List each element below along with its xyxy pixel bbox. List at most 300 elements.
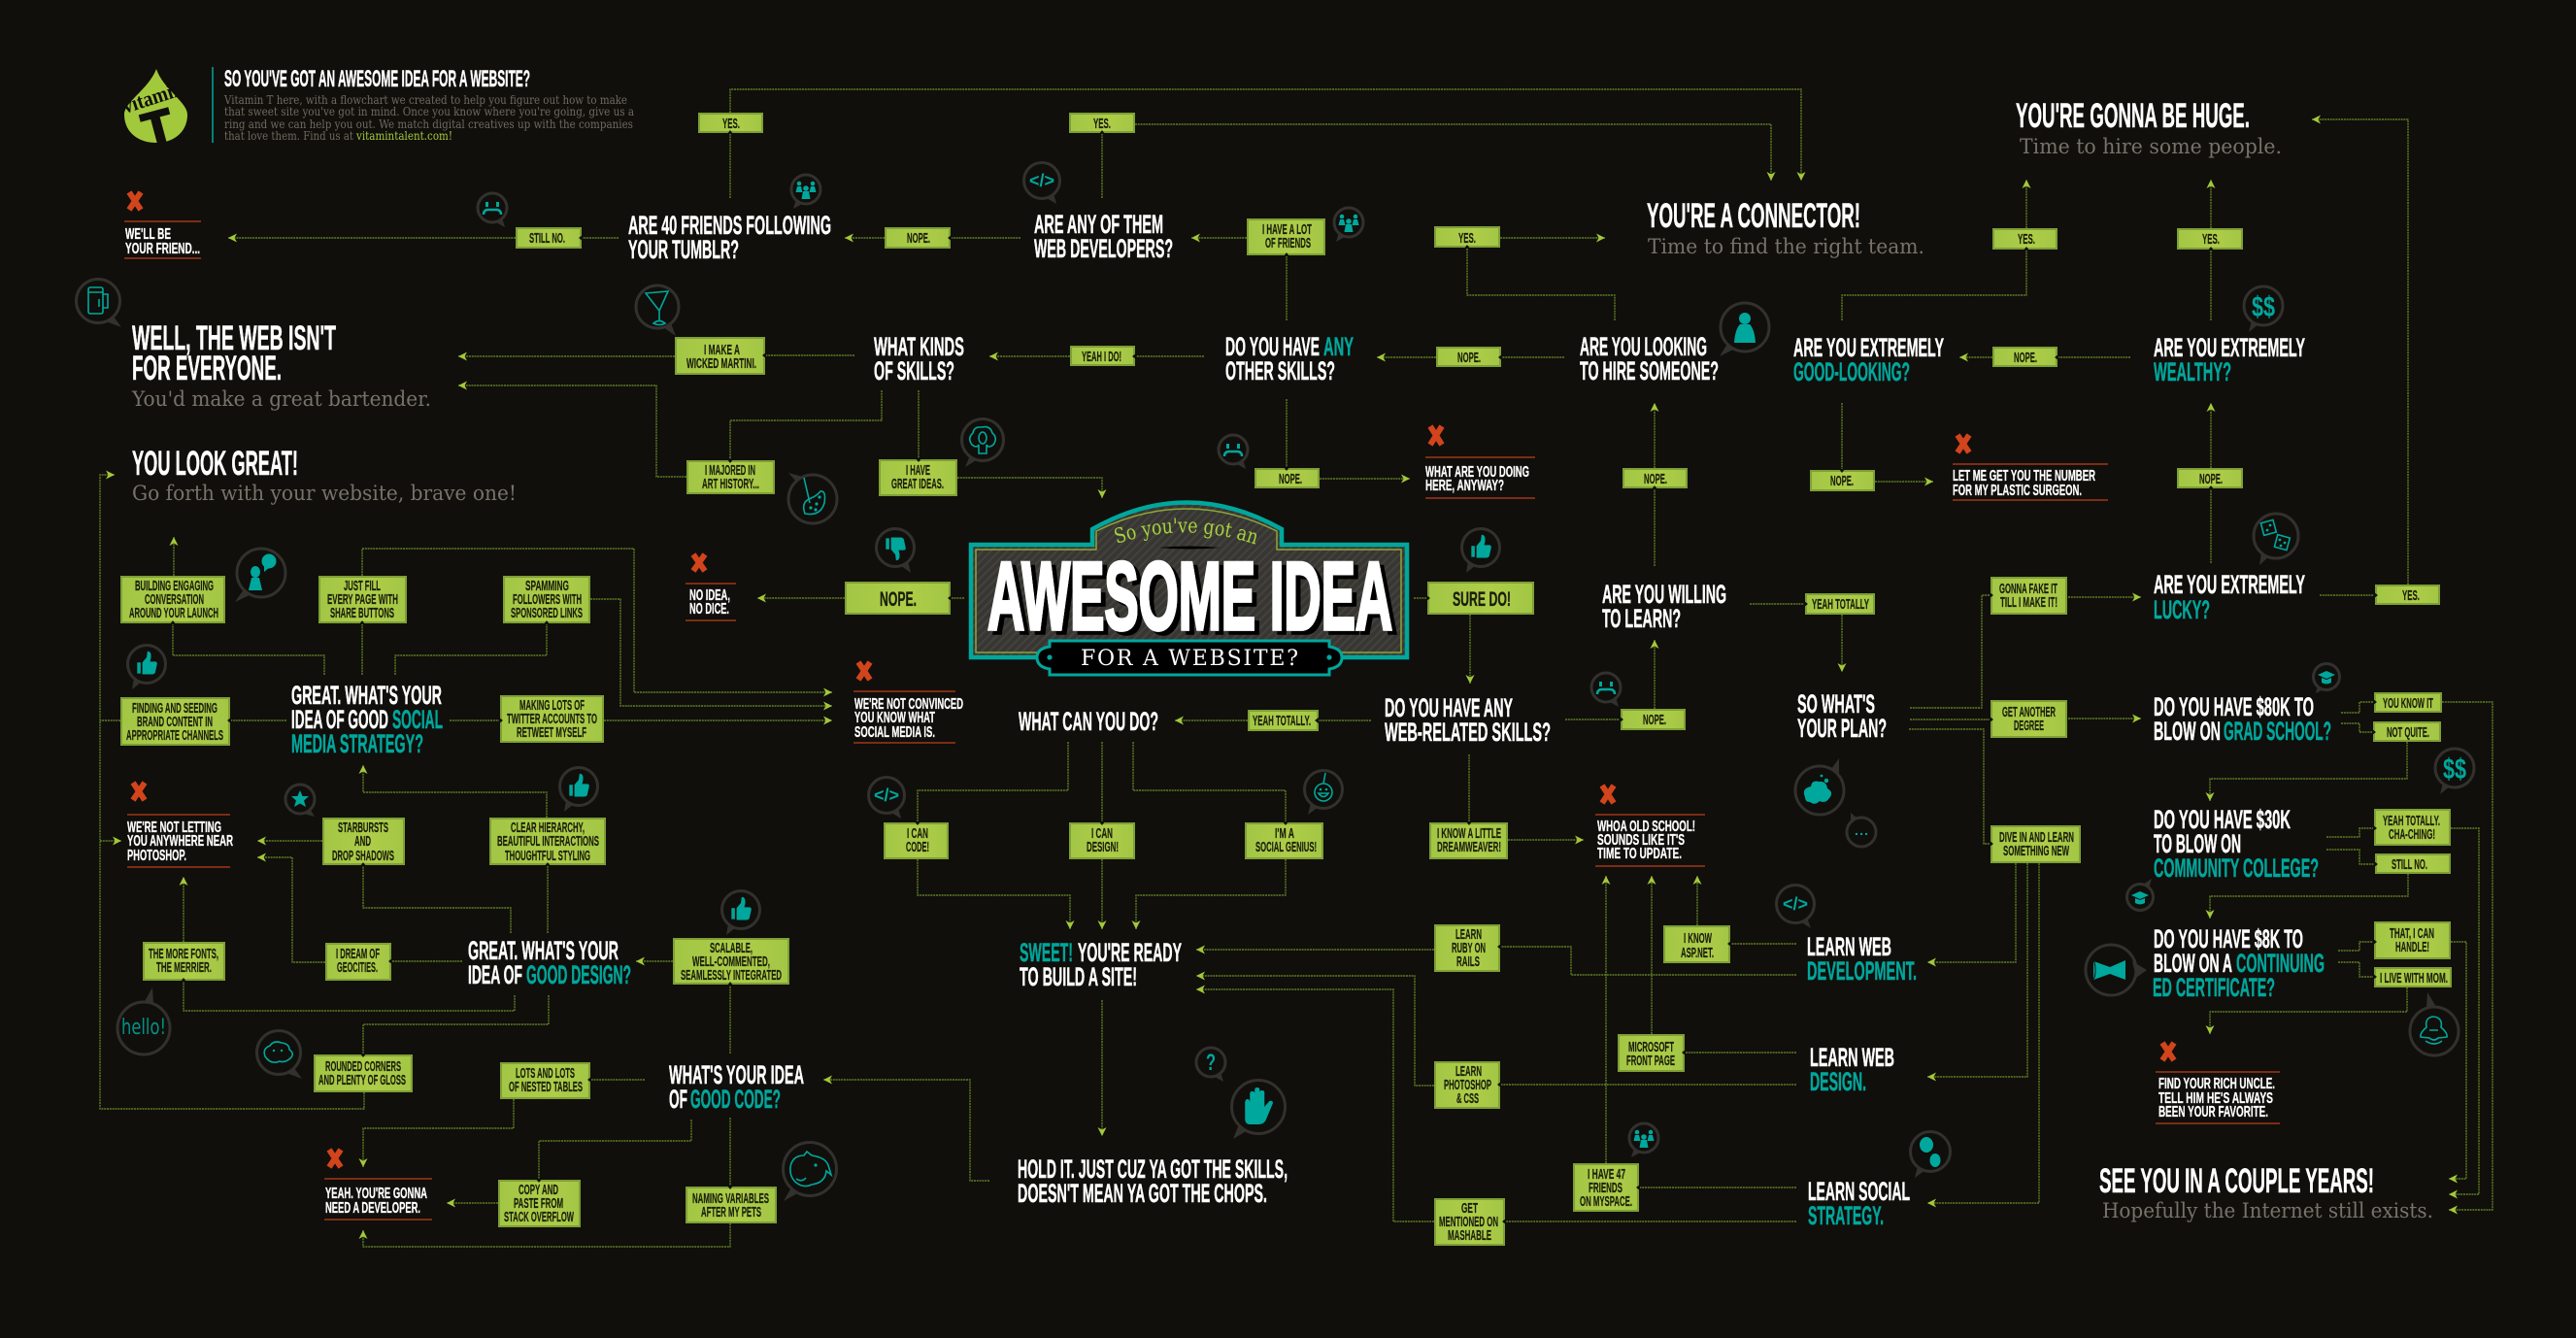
question: are 40 friends: YOUR TUMBLR? bbox=[628, 235, 739, 264]
box: i can code bbox=[885, 823, 948, 858]
box: starbursts: STARBURSTS bbox=[338, 820, 388, 836]
verdict: not convinced: YOU KNOW WHAT bbox=[854, 710, 935, 726]
intro paragraph: vitamintalent.com! bbox=[355, 128, 452, 143]
arrow: sign to nope bbox=[951, 597, 964, 599]
outcome: learn web design: LEARN WEB bbox=[1810, 1043, 1894, 1072]
question: good code: GOOD CODE? bbox=[690, 1085, 781, 1114]
icon: graduation cap bbox=[2126, 879, 2154, 911]
box: copy and paste: STACK OVERFLOW bbox=[504, 1210, 574, 1225]
verdict: old school: TIME TO UPDATE. bbox=[1597, 846, 1682, 862]
outcome: you're a connector bbox=[1647, 197, 1924, 258]
arrow: mashable to sweet bbox=[1196, 989, 1434, 1221]
verdict: need a developer bbox=[324, 1150, 432, 1220]
arrow: social to mashable bbox=[1505, 1221, 1796, 1222]
box: that i can handle bbox=[2375, 922, 2450, 958]
arrow: martini to bartender bbox=[458, 355, 675, 357]
box: building engaging conversation bbox=[121, 577, 224, 622]
box: yeah totally cha-ching bbox=[2375, 810, 2450, 845]
box: i live with mom: I LIVE WITH MOM. bbox=[2380, 971, 2448, 987]
icon: thumbs up bbox=[559, 767, 598, 812]
box: finding and seeding bbox=[121, 698, 229, 745]
logo: Vitamin T drop: vitamin bbox=[119, 76, 185, 118]
intro paragraph: that love them. Find us at bbox=[224, 128, 353, 143]
box: that i can handle: HANDLE! bbox=[2395, 940, 2429, 955]
arrow: nope to willing bbox=[1654, 640, 1656, 709]
box: rounded corners bbox=[315, 1055, 412, 1091]
arrow: yes to huge bbox=[2210, 180, 2212, 228]
question: good code bbox=[669, 1060, 804, 1114]
arrow: degree to grad school bbox=[2068, 718, 2141, 719]
box: finding and seeding: APPROPRIATE CHANNELS bbox=[126, 728, 223, 744]
box: yeah totally (willing) bbox=[1806, 594, 1874, 614]
box: scalable: SCALABLE, bbox=[710, 941, 753, 956]
outcome: learn web development: LEARN WEB bbox=[1807, 932, 1891, 961]
question: what can you do: WHAT CAN YOU DO? bbox=[1019, 707, 1158, 736]
box: starbursts bbox=[323, 819, 404, 864]
arrow: lucky to yes bbox=[2320, 594, 2375, 596]
outcome: hold it bbox=[1018, 1154, 1288, 1208]
icon: thumbs down bbox=[876, 528, 915, 573]
arrow: friends to developers bbox=[1191, 237, 1247, 239]
intro paragraph bbox=[223, 92, 634, 143]
box: clear hierarchy: THOUGHTFUL STYLING bbox=[505, 849, 590, 864]
arrow: design to photoshop bbox=[1500, 1084, 1796, 1086]
question: $80k grad school: GRAD SCHOOL? bbox=[2224, 717, 2331, 746]
arrow: design to front page bbox=[1685, 1052, 1796, 1054]
text: SO YOU'VE GOT AN AWESOME IDEA FOR A WEBSITE? bbox=[224, 66, 530, 92]
arrow: rounded to you look great bbox=[100, 475, 364, 1109]
central sign: awesome idea: FOR A WEBSITE? bbox=[1081, 647, 1298, 671]
box: not quite bbox=[2374, 722, 2440, 741]
arrow: wealthy to yes bbox=[2210, 250, 2212, 320]
box: get mentioned on mashable: GET bbox=[1461, 1201, 1478, 1217]
question: web-related skills: WEB-RELATED SKILLS? bbox=[1385, 718, 1551, 747]
box: nope (wealthy) bbox=[1993, 348, 2057, 366]
arrow: nope to tumblr bbox=[845, 237, 885, 239]
arrow: making lots to not convinced bbox=[604, 719, 832, 721]
arrow: yes to connector bbox=[1500, 237, 1605, 239]
question: good design bbox=[468, 936, 631, 989]
box: i dream of geocities: I DREAM OF bbox=[336, 947, 380, 962]
arrow: scalable to design bbox=[636, 960, 673, 962]
icon: sad face bbox=[1219, 435, 1248, 469]
box: i'm a social genius bbox=[1246, 823, 1322, 858]
box: starbursts: DROP SHADOWS bbox=[332, 849, 394, 864]
box: still no (college) bbox=[2376, 854, 2450, 873]
arrow: design to geocities bbox=[391, 960, 462, 962]
box: get mentioned on mashable bbox=[1435, 1199, 1504, 1245]
arrow: strategy to finding bbox=[230, 719, 286, 721]
icon: palette bbox=[788, 473, 837, 523]
icon: chat person bbox=[235, 549, 285, 602]
box: scalable: SEAMLESSLY INTEGRATED bbox=[681, 968, 782, 984]
box: just fill every page bbox=[319, 577, 406, 622]
box: yes (hire): YES. bbox=[1458, 231, 1476, 247]
question: good social media strategy bbox=[291, 681, 443, 758]
arrow: other skills to nope bbox=[1286, 399, 1288, 468]
question: willing to learn: ARE YOU WILLING bbox=[1602, 580, 1726, 609]
icon: beer mug bbox=[76, 280, 121, 327]
box: nope (good-looking): NOPE. bbox=[1830, 474, 1854, 489]
box: dive in and learn bbox=[1991, 826, 2080, 862]
box: spamming followers bbox=[504, 577, 589, 622]
arrow: tumblr to yes bbox=[729, 133, 731, 198]
box: nope (developers) bbox=[886, 228, 950, 248]
box: i make a wicked martini bbox=[676, 338, 764, 374]
arrow: still no to certificate bbox=[2210, 874, 2408, 919]
box: just fill every page: JUST FILL bbox=[344, 579, 381, 594]
box: finding and seeding: BRAND CONTENT IN bbox=[137, 715, 213, 730]
question: any other skills bbox=[1225, 332, 1354, 385]
arrow: strategy to just fill bbox=[361, 623, 363, 675]
arrow: great ideas to sign bbox=[957, 478, 1102, 498]
outcome: learn web development: DEVELOPMENT. bbox=[1807, 956, 1917, 986]
intro paragraph: Vitamin T here, with a flowchart we created to help you figure out how to make bbox=[223, 92, 627, 107]
outcome: web isn't for everyone: FOR EVERYONE. bbox=[132, 350, 282, 387]
box: nope (hire) bbox=[1437, 348, 1500, 366]
box: learn ruby on rails: LEARN bbox=[1455, 927, 1482, 943]
box: making lots of twitter accounts: MAKING LOTS OF bbox=[519, 698, 585, 714]
box: nope (willing) bbox=[1623, 469, 1687, 487]
arrow: developers to nope bbox=[951, 237, 1020, 239]
box: learn ruby on rails: RUBY ON bbox=[1452, 941, 1486, 956]
logo: Vitamin T drop: T bbox=[137, 99, 179, 155]
box: yes (lucky): YES. bbox=[2402, 588, 2420, 604]
box: yes (tumblr): YES. bbox=[722, 117, 740, 132]
arrow: dive in to design bbox=[1927, 863, 2027, 1077]
box: yeah totally cha-ching: CHA-CHING! bbox=[2389, 827, 2435, 843]
arrow: plan to degree bbox=[1910, 719, 1991, 720]
box: making lots of twitter accounts bbox=[501, 696, 603, 742]
arrow: geocities to photoshop verdict bbox=[257, 857, 325, 962]
icon: sad face bbox=[1591, 673, 1621, 707]
arrow: do to code bbox=[918, 742, 1068, 822]
box: i'm a social genius: I'M A bbox=[1275, 826, 1294, 842]
box: nope (wealthy): NOPE. bbox=[2014, 351, 2037, 366]
question: $30k community college bbox=[2154, 805, 2319, 883]
arrow: front page to update bbox=[1651, 876, 1653, 1034]
question: extremely lucky: ARE YOU EXTREMELY bbox=[2154, 570, 2305, 599]
arrow: certificate to mom bbox=[2338, 962, 2374, 977]
icon: question mark bbox=[1196, 1048, 1225, 1082]
arrow: good-looking to nope bbox=[1841, 403, 1843, 470]
box: i have 47 friends: ON MYSPACE. bbox=[1580, 1194, 1632, 1210]
outcome: you look great bbox=[132, 445, 517, 505]
box: i dream of geocities: GEOCITIES. bbox=[337, 960, 378, 976]
arrow: nope to hire bbox=[1654, 403, 1656, 468]
outcome: sweet, ready to build: YOU'RE READY bbox=[1078, 938, 1182, 967]
box: nope (other skills): NOPE. bbox=[1279, 472, 1302, 487]
box: yes (wealthy) bbox=[2178, 229, 2242, 249]
box: yes (developers) bbox=[1070, 114, 1134, 132]
icon: hello bubble bbox=[117, 987, 170, 1054]
question: good design: IDEA OF bbox=[468, 960, 522, 989]
verdict: plastic surgeon: FOR MY PLASTIC SURGEON. bbox=[1953, 483, 2082, 499]
box: that i can handle: THAT, I CAN bbox=[2390, 926, 2434, 942]
arrow: code to sweet bbox=[918, 859, 1070, 929]
box: microsoft front page: FRONT PAGE bbox=[1626, 1054, 1675, 1069]
central sign: awesome idea: So you've got an bbox=[1115, 518, 1256, 544]
icon: star bbox=[285, 785, 315, 817]
outcome: you're a connector: Time to find the right team. bbox=[1648, 235, 1924, 258]
question: extremely lucky bbox=[2154, 570, 2305, 624]
outcome: sweet, ready to build: TO BUILD A SITE! bbox=[1020, 962, 1137, 991]
arrow: you know it to see you bbox=[2442, 702, 2492, 1210]
arrow: yes to connector bbox=[1135, 124, 1771, 181]
box: yes (good-looking): YES. bbox=[2018, 232, 2035, 248]
arrow: yes to huge bbox=[2025, 180, 2027, 228]
verdict: rich uncle bbox=[2156, 1043, 2280, 1123]
box: get mentioned on mashable: MENTIONED ON bbox=[1439, 1215, 1498, 1230]
outcome: you're a connector: YOU'RE A CONNECTOR! bbox=[1647, 197, 1860, 235]
intro divider bbox=[212, 67, 214, 143]
icon: code bbox=[1023, 163, 1060, 204]
arrow: web skills to dreamweaver bbox=[1468, 754, 1470, 822]
arrow: handle to see you bbox=[2449, 942, 2466, 1179]
icon: bow tie bbox=[2086, 945, 2147, 995]
box: yeah totally (web skills) bbox=[1249, 711, 1318, 730]
arrow: strategy to building bbox=[173, 623, 324, 675]
box: i can design bbox=[1070, 823, 1134, 858]
icon: dice bbox=[2254, 514, 2298, 565]
question: extremely lucky: LUCKY? bbox=[2154, 595, 2210, 624]
box: i live with mom bbox=[2375, 968, 2451, 987]
box: the more fonts: THE MORE FONTS, bbox=[149, 947, 218, 962]
icon: person bbox=[1720, 303, 1769, 356]
box: nope (other skills) bbox=[1255, 469, 1319, 487]
arrow: sweet to hold it bbox=[1101, 1000, 1103, 1136]
box: spamming followers: FOLLOWERS WITH bbox=[513, 592, 582, 608]
verdict: old school: SOUNDS LIKE IT'S bbox=[1597, 832, 1685, 849]
question: $80k grad school: BLOW ON bbox=[2154, 717, 2221, 746]
box: clear hierarchy: CLEAR HIERARCHY, bbox=[511, 820, 585, 836]
box: i have a lot of friends: OF FRIENDS bbox=[1265, 236, 1311, 251]
outcome: sweet, ready to build: SWEET! bbox=[1020, 938, 1073, 967]
question: extremely good-looking: GOOD-LOOKING? bbox=[1793, 357, 1910, 386]
box: sure do bbox=[1428, 583, 1533, 614]
arrow: myspace to update bbox=[1605, 876, 1607, 1163]
icon: dollars: $$ bbox=[2252, 291, 2275, 323]
verdict: need a developer: YEAH. YOU'RE GONNA bbox=[325, 1186, 427, 1202]
arrow: yeah totally to plan bbox=[1841, 615, 1843, 672]
box: i know asp.net bbox=[1664, 926, 1729, 962]
box: clear hierarchy bbox=[490, 819, 605, 864]
arrow: social to myspace bbox=[1639, 1187, 1796, 1188]
arrow: tumblr to still no bbox=[582, 237, 619, 239]
verdict: we'll be your friend: WE'LL BE bbox=[125, 226, 171, 243]
box: nope (web skills): NOPE. bbox=[1643, 713, 1666, 728]
box: i dream of geocities bbox=[326, 944, 390, 980]
box: yes (tumblr) bbox=[699, 114, 762, 132]
arrow: skills to art history bbox=[730, 390, 882, 460]
box: scalable bbox=[674, 939, 788, 984]
box: yeah totally (web skills): YEAH TOTALLY. bbox=[1253, 714, 1311, 729]
box: i have a lot of friends bbox=[1248, 219, 1324, 254]
box: gonna fake it: GONNA FAKE IT bbox=[1999, 582, 2057, 597]
outcome: you look great: YOU LOOK GREAT! bbox=[132, 445, 298, 483]
outcome: learn social strategy: STRATEGY. bbox=[1808, 1201, 1884, 1230]
icon: dollars: $$ bbox=[2443, 753, 2466, 786]
box: i majored in art history: ART HISTORY... bbox=[702, 477, 759, 492]
question: $8k continuing ed bbox=[2153, 924, 2325, 1002]
question: any web developers: ARE ANY OF THEM bbox=[1034, 210, 1163, 239]
arrow: ruby to sweet bbox=[1196, 949, 1434, 951]
question: good design: GREAT. WHAT'S YOUR bbox=[468, 936, 619, 965]
box: i make a wicked martini: WICKED MARTINI. bbox=[686, 356, 756, 372]
arrow: nope to other skills bbox=[1377, 356, 1436, 358]
arrow: nope to good-looking bbox=[1959, 356, 1992, 358]
box: nope (developers): NOPE. bbox=[907, 231, 930, 247]
box: dive in and learn: DIVE IN AND LEARN bbox=[1999, 830, 2074, 846]
icon: idea tree bbox=[961, 419, 1004, 467]
box: i know a little dreamweaver: I KNOW A LITTLE bbox=[1437, 826, 1501, 842]
icon: chat bubbles bbox=[1911, 1132, 1950, 1178]
verdict: rich uncle: FIND YOUR RICH UNCLE. bbox=[2158, 1076, 2275, 1092]
box: lots of nested tables bbox=[501, 1063, 589, 1098]
box: the more fonts bbox=[144, 943, 224, 980]
arrow: code to naming bbox=[729, 1118, 731, 1187]
box: get another degree bbox=[1991, 701, 2066, 737]
box: gonna fake it bbox=[1991, 578, 2066, 614]
arrow: to photoshop verdict bbox=[100, 840, 121, 842]
question: good code: WHAT'S YOUR IDEA bbox=[669, 1060, 804, 1089]
arrow: plan to fake it bbox=[1910, 595, 1991, 708]
verdict: no photoshop: YOU ANYWHERE NEAR bbox=[127, 833, 233, 850]
box: scalable: WELL-COMMENTED, bbox=[692, 954, 770, 970]
verdict: what are you doing here: HERE, ANYWAY? bbox=[1425, 478, 1504, 494]
question: good code: OF bbox=[669, 1085, 687, 1114]
icon: graduation cap bbox=[2313, 664, 2340, 693]
box: i know asp.net: ASP.NET. bbox=[1681, 946, 1714, 961]
question: what kinds of skills: OF SKILLS? bbox=[874, 356, 954, 385]
question: extremely good-looking: ARE YOU EXTREMELY bbox=[1793, 333, 1944, 362]
icon: genius face bbox=[1305, 771, 1342, 815]
box: just fill every page: SHARE BUTTONS bbox=[330, 606, 394, 621]
box: i majored in art history: I MAJORED IN bbox=[705, 463, 755, 479]
question: $30k community college: DO YOU HAVE $30K bbox=[2154, 805, 2291, 834]
arrow: photoshop to sweet bbox=[1196, 976, 1434, 1086]
box: learn ruby on rails bbox=[1435, 925, 1499, 971]
box: making lots of twitter accounts: RETWEET MYSELF bbox=[517, 725, 586, 741]
question: $8k continuing ed: ED CERTIFICATE? bbox=[2153, 973, 2275, 1002]
verdict: not convinced bbox=[853, 662, 963, 743]
arrow: fake it to lucky bbox=[2068, 596, 2141, 598]
arrow: art history to bartender bbox=[458, 385, 686, 477]
arrow: wealthy to nope bbox=[2057, 356, 2130, 358]
arrow: college to still no bbox=[2326, 850, 2375, 864]
box: yeah totally (willing): YEAH TOTALLY bbox=[1812, 597, 1869, 613]
icon: friends bbox=[791, 175, 820, 209]
arrow: skills to great ideas bbox=[918, 390, 920, 459]
icon: ellipsis: ... bbox=[1855, 822, 1868, 838]
box: i know a little dreamweaver: DREAMWEAVER! bbox=[1437, 840, 1501, 855]
box: i have great ideas bbox=[880, 460, 956, 495]
verdict: no photoshop: WE'RE NOT LETTING bbox=[127, 820, 221, 836]
icon: mom bbox=[2410, 992, 2459, 1055]
box: yes (hire) bbox=[1435, 227, 1499, 247]
box: finding and seeding: FINDING AND SEEDING bbox=[132, 701, 217, 717]
icon: stop hand bbox=[1231, 1080, 1286, 1139]
box: rounded corners: AND PLENTY OF GLOSS bbox=[318, 1073, 406, 1088]
box: nope (lucky): NOPE. bbox=[2199, 472, 2223, 487]
box: nope (lucky) bbox=[2178, 469, 2242, 487]
question: $8k continuing ed: BLOW ON A bbox=[2154, 949, 2232, 978]
icon: hello bubble: hello! bbox=[121, 1016, 166, 1040]
logo: Vitamin T drop bbox=[119, 69, 187, 155]
box: copy and paste: COPY AND bbox=[519, 1183, 558, 1198]
box: just fill every page: EVERY PAGE WITH bbox=[327, 592, 398, 608]
question: $8k continuing ed: DO YOU HAVE $8K TO bbox=[2154, 924, 2303, 953]
question: are 40 friends: ARE 40 FRIENDS FOLLOWING bbox=[628, 211, 831, 240]
icon: friends bbox=[1334, 208, 1363, 242]
box: i can code: CODE! bbox=[906, 840, 929, 855]
verdict: plastic surgeon bbox=[1953, 435, 2108, 500]
verdict: no idea no dice: NO IDEA, bbox=[689, 587, 730, 604]
question: looking to hire bbox=[1580, 332, 1719, 385]
icon: thumbs up bbox=[722, 891, 759, 935]
verdict: not convinced: WE'RE NOT CONVINCED bbox=[854, 696, 963, 713]
arrow: code to nested tables bbox=[590, 1079, 645, 1081]
icon: sad face bbox=[478, 193, 507, 227]
box: i majored in art history bbox=[687, 461, 774, 493]
arrow: strategy to spamming bbox=[395, 623, 547, 675]
outcome: learn web design bbox=[1810, 1043, 1894, 1096]
box: big nope: NOPE. bbox=[880, 588, 917, 611]
box: microsoft front page: MICROSOFT bbox=[1628, 1040, 1674, 1055]
outcome: you're gonna be huge bbox=[2016, 97, 2282, 158]
arrow: dive in to development bbox=[1927, 863, 2016, 962]
box: still no (college): STILL NO. bbox=[2392, 857, 2427, 873]
arrow: web skills to nope bbox=[1565, 719, 1621, 720]
arrow: mom to rich uncle bbox=[2210, 987, 2407, 1034]
question: looking to hire: TO HIRE SOMEONE? bbox=[1580, 356, 1719, 385]
box: spamming followers: SPAMMING bbox=[525, 579, 569, 594]
arrow: code to copy paste bbox=[539, 1120, 691, 1180]
question: willing to learn bbox=[1602, 580, 1726, 633]
question: are 40 friends bbox=[628, 211, 831, 264]
arrow: other skills to yeah i do bbox=[1135, 355, 1204, 357]
question: any other skills: OTHER SKILLS? bbox=[1225, 356, 1335, 385]
arrow: willing to yeah totally bbox=[1750, 603, 1805, 605]
arrow: design to more fonts bbox=[184, 981, 515, 1011]
box: building engaging conversation: BUILDING ENGAGING bbox=[135, 579, 214, 594]
arrow: design to sweet bbox=[1101, 859, 1103, 929]
outcome: hold it: HOLD IT. JUST CUZ YA GOT THE SKILLS, bbox=[1018, 1154, 1288, 1184]
verdict: need a developer: NEED A DEVELOPER. bbox=[325, 1200, 420, 1217]
icon: dog bbox=[783, 1142, 837, 1201]
box: copy and paste bbox=[499, 1181, 580, 1226]
outcome: you're gonna be huge: YOU'RE GONNA BE HUGE. bbox=[2016, 97, 2250, 135]
icon: code: </> bbox=[1029, 171, 1054, 190]
question: good social media strategy: MEDIA STRATEGY? bbox=[291, 729, 423, 758]
arrow: nope to no dice bbox=[757, 597, 845, 599]
arrow: building to you look great bbox=[173, 537, 175, 576]
outcome: learn social strategy: LEARN SOCIAL bbox=[1808, 1177, 1910, 1206]
box: yes (wealthy): YES. bbox=[2202, 232, 2220, 248]
verdict: we'll be your friend: YOUR FRIEND... bbox=[125, 241, 200, 257]
box: yeah totally cha-ching: YEAH TOTALLY. bbox=[2383, 814, 2440, 829]
arrow: still no to we'll be your friend bbox=[228, 237, 516, 239]
arrow: other skills to friends bbox=[1286, 255, 1288, 320]
box: i know a little dreamweaver bbox=[1430, 823, 1507, 858]
box: learn photoshop: LEARN bbox=[1455, 1064, 1482, 1080]
box: learn photoshop bbox=[1435, 1062, 1499, 1108]
box: you know it: YOU KNOW IT bbox=[2383, 696, 2433, 712]
verdict: rich uncle: TELL HIM HE'S ALWAYS bbox=[2158, 1090, 2273, 1107]
question: any web developers bbox=[1034, 210, 1173, 263]
box: i'm a social genius: SOCIAL GENIUS! bbox=[1255, 840, 1317, 855]
question: what's your plan bbox=[1797, 689, 1887, 743]
